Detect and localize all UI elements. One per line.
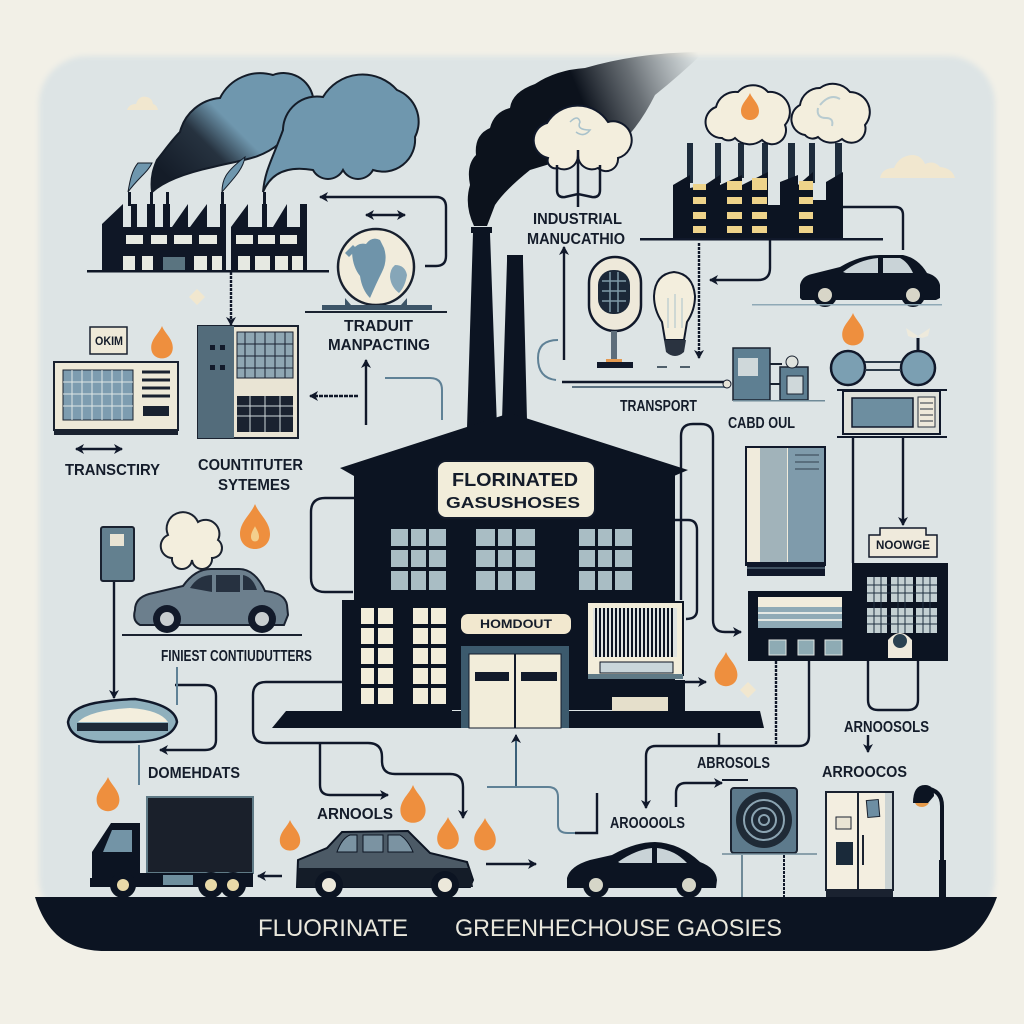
refrigerator	[746, 447, 825, 576]
grey car: left	[122, 569, 302, 636]
label: counter systems: SYTEMES	[218, 477, 290, 494]
label: aerosols lower right: AROOOOLS	[610, 815, 685, 832]
label: aerosols right	[822, 661, 929, 781]
label: aerosols lower left: ARNOOLS	[317, 806, 393, 823]
meter, cloud and flame	[101, 504, 270, 581]
box truck	[90, 797, 253, 898]
label: card oul: CABD OUL	[728, 415, 795, 432]
sign: holdout	[461, 614, 571, 634]
label: counter systems	[198, 457, 303, 494]
microscope and light bulb	[589, 257, 695, 368]
label: industrial manufacturing: MANUCATHIO	[527, 231, 625, 248]
arrows: lower left	[114, 498, 355, 785]
lower left windows	[361, 608, 446, 704]
bottom banner	[35, 897, 997, 951]
top left arrows	[320, 197, 446, 266]
smoke plume 1	[128, 163, 152, 192]
flame in cloud	[741, 93, 759, 120]
grid windows	[867, 577, 937, 633]
flame and twin gauges	[831, 313, 935, 385]
control box	[733, 348, 825, 402]
label: noovoge	[869, 528, 937, 557]
roof	[340, 413, 688, 476]
sign: florinated gasushoses: GASUSHOSES	[446, 495, 580, 512]
label: counter systems: COUNTITUTER	[198, 457, 303, 474]
AC unit window	[758, 597, 842, 628]
background panel	[39, 56, 995, 926]
flames	[97, 652, 737, 851]
arrows: centre right	[538, 247, 731, 388]
base	[272, 711, 764, 728]
arrows: left middle	[231, 272, 442, 425]
window grids	[391, 529, 632, 590]
arrows: right middle	[674, 424, 903, 632]
label: noovoge: NOOWGE	[876, 538, 930, 552]
arrow: left width	[76, 448, 122, 450]
left appliance: air conditioner: OKIM	[95, 334, 123, 348]
sign: florinated gasushoses: FLORINATED	[452, 470, 578, 490]
label: trading manufacturing: TRADUIT	[344, 318, 413, 335]
fan unit	[722, 788, 817, 897]
street lamp	[913, 785, 946, 897]
factory: top left with smoke	[87, 73, 419, 272]
smoke plume 4	[263, 74, 419, 192]
small decorative clouds	[127, 97, 955, 698]
black car: top right	[752, 255, 942, 307]
entrance doors	[461, 646, 569, 728]
sign: holdout: HOMDOUT	[480, 617, 553, 631]
smoke plume 3	[222, 157, 245, 192]
label: aerosols right: ARROOCOS	[822, 764, 907, 781]
left appliance: server panel	[198, 326, 298, 438]
central building	[272, 227, 764, 728]
rooftop air unit	[587, 602, 683, 711]
bottom banner: GREENHECHOUSE GAOSIES	[455, 915, 782, 942]
arrows: lower centre	[253, 682, 706, 876]
smoke plume 2	[152, 73, 313, 192]
oval device	[68, 699, 177, 742]
twin chimneys	[467, 227, 527, 428]
black car: lower	[567, 842, 717, 898]
white clouds	[706, 84, 870, 144]
tree-like cloud	[534, 106, 632, 207]
label: aerosols mid right: ABROSOLS	[697, 755, 770, 772]
building body	[354, 470, 675, 710]
label: trading manufacturing: MANPACTING	[328, 337, 430, 354]
chimneys	[687, 143, 842, 183]
label: finest contributers: FINIEST CONTIUDUTTERS	[161, 648, 312, 665]
label: trading manufacturing	[328, 318, 430, 354]
label: industrial manufacturing	[527, 211, 625, 248]
label: aerosols right: ARNOOSOLS	[844, 719, 929, 736]
bottom banner: FLUORINATE	[258, 915, 408, 942]
label: transport: TRANSPORT	[620, 398, 697, 415]
factory row: top right	[640, 84, 883, 241]
factory silhouette	[102, 204, 307, 270]
central smoke	[468, 52, 704, 226]
microwave	[837, 390, 947, 437]
left appliance: air conditioner	[54, 326, 178, 435]
label: aerosols mid right	[646, 661, 809, 808]
factory block	[673, 172, 843, 238]
label: domehdats: DOMEHDATS	[148, 765, 240, 782]
sedan: lower centre	[297, 831, 473, 899]
label: transctiry: TRANSCTIRY	[65, 462, 160, 479]
arrows: right top	[699, 207, 903, 358]
globe on stand	[305, 229, 447, 313]
sign: florinated gasushoses	[437, 461, 595, 518]
fridge: lower right	[826, 792, 893, 897]
right side building	[748, 563, 948, 661]
label: industrial manufacturing: INDUSTRIAL	[533, 211, 622, 228]
yellow windows	[693, 178, 813, 233]
